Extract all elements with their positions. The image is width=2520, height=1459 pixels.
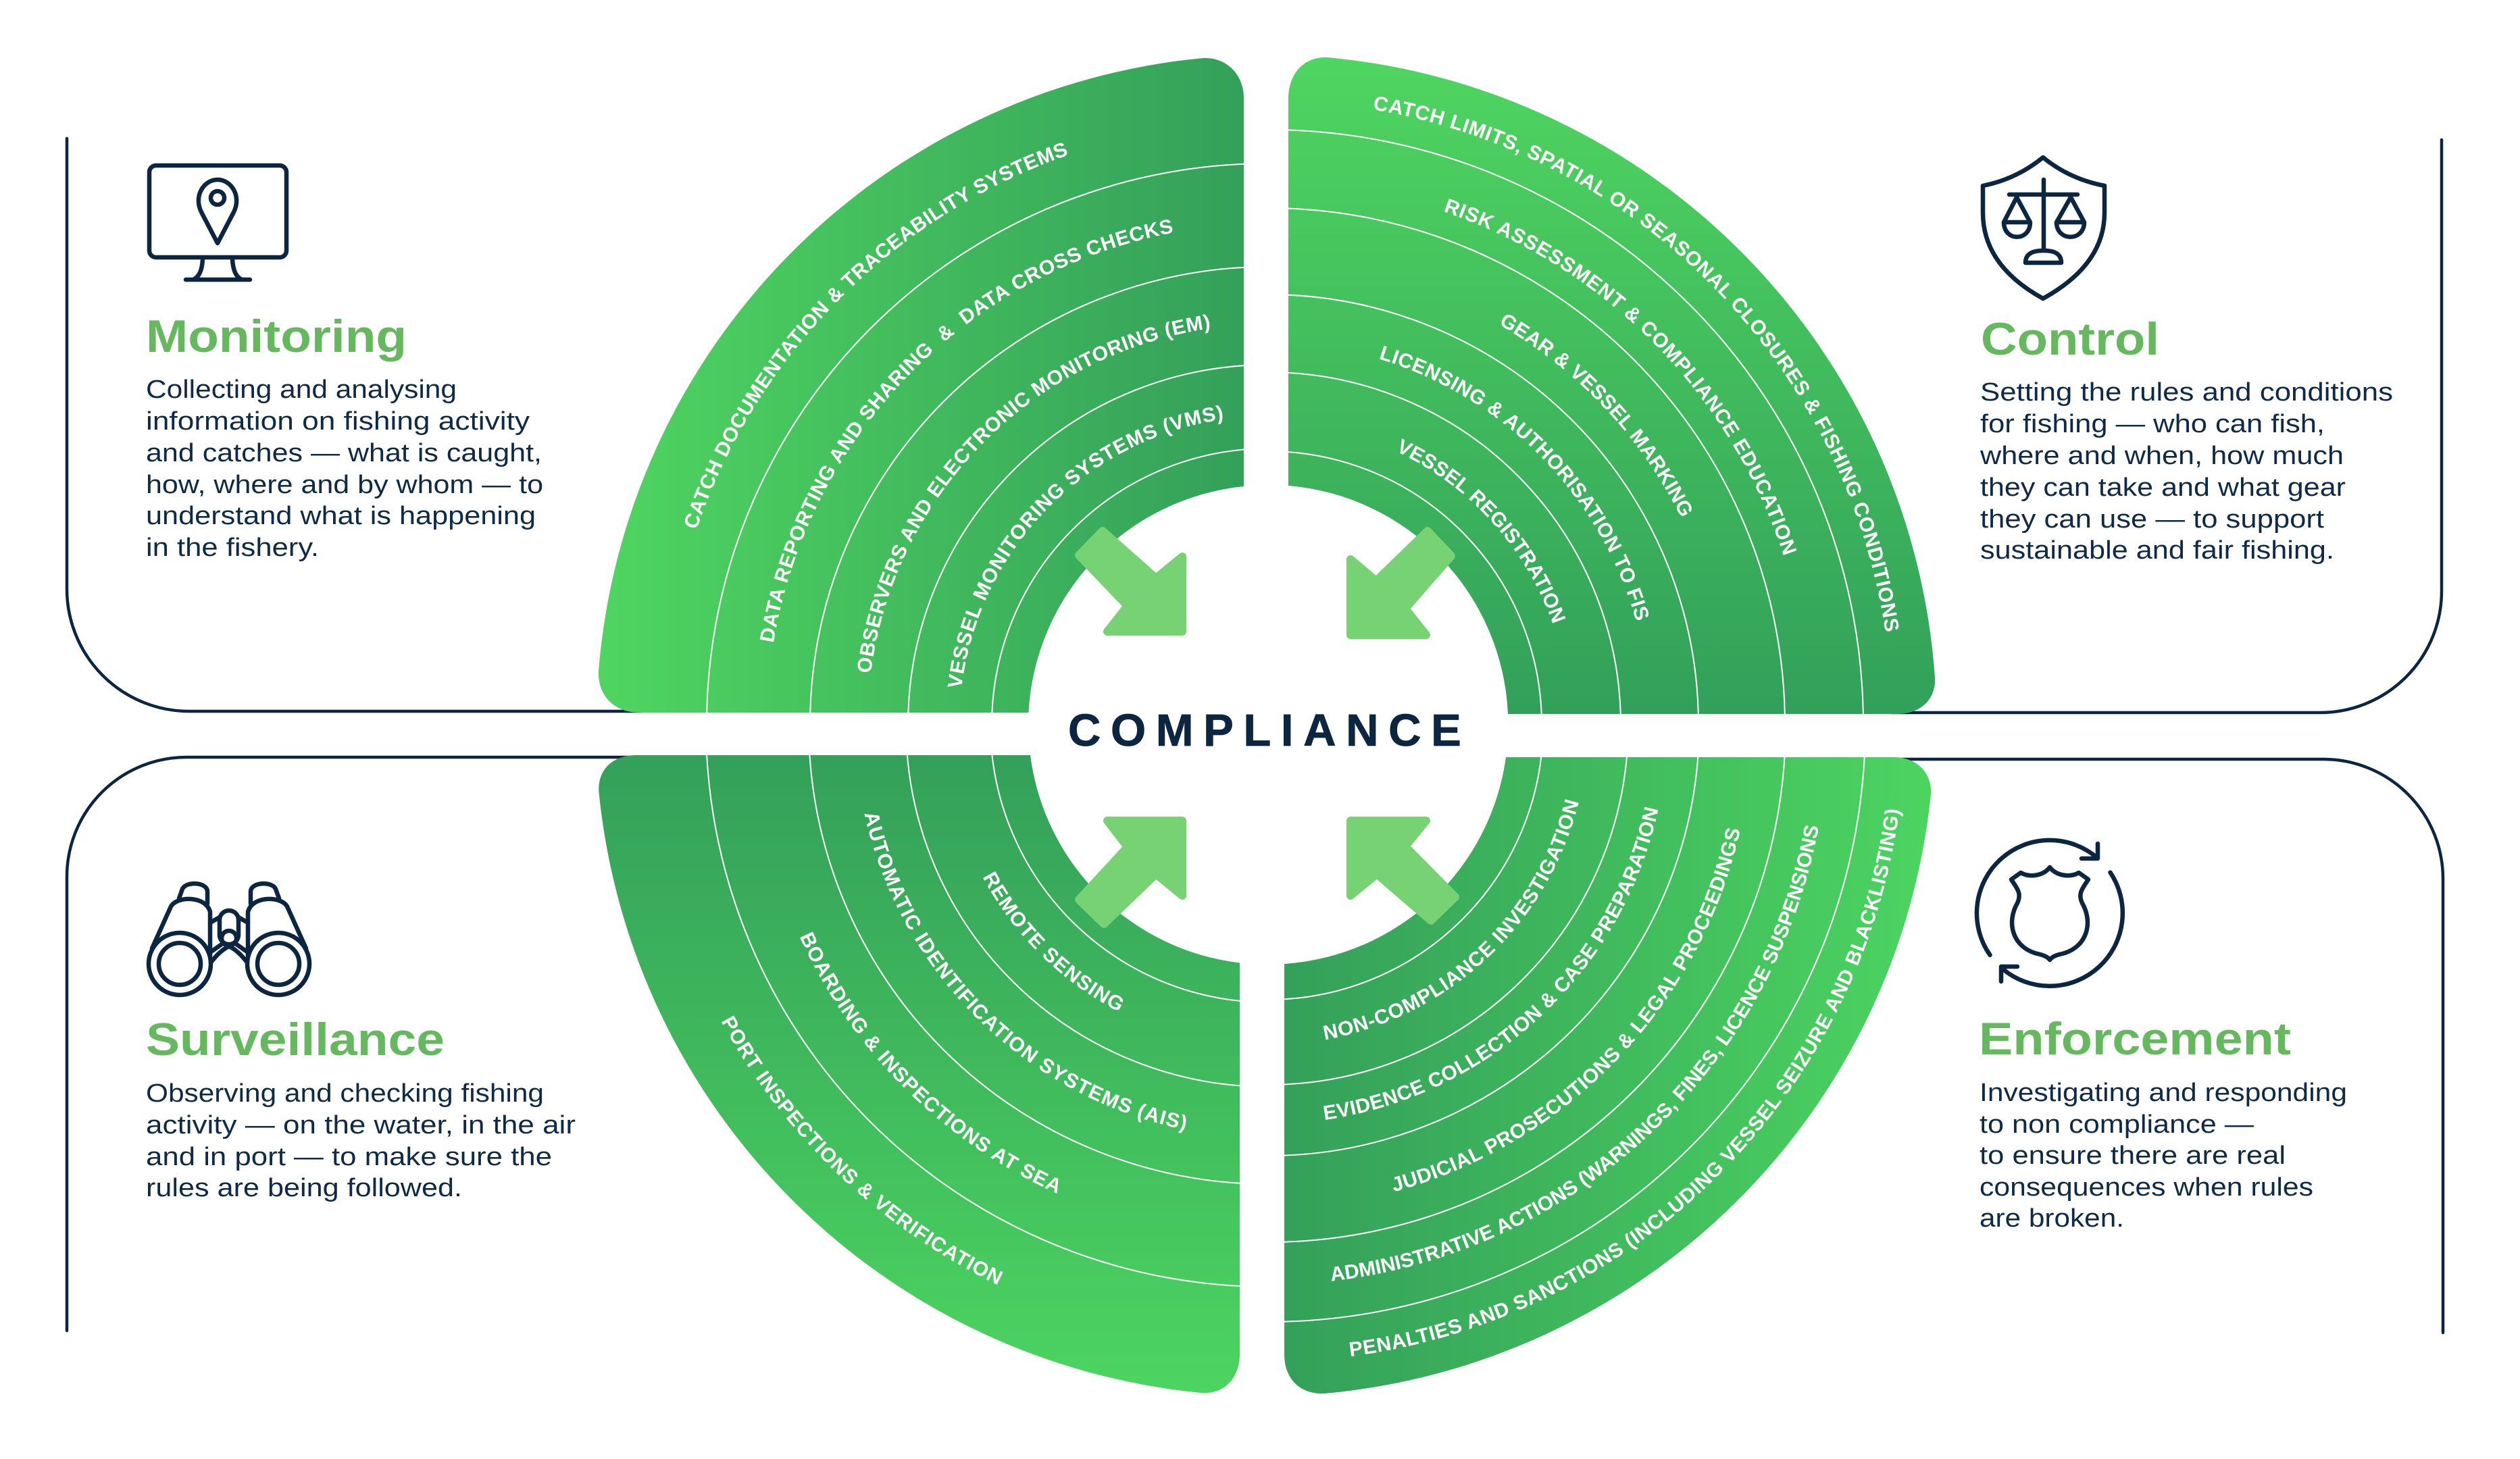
- label: boarding: BOARDING & INSPECTIONS AT SEA: [800, 931, 1058, 1194]
- panel: surveillance quadrant: [599, 755, 1240, 1393]
- icon: monitor with pin: [149, 165, 286, 280]
- label: licensing: LICENSING & AUTHORISATION TO FIS: [1380, 346, 1648, 620]
- label: evidence collection: EVIDENCE COLLECTION & CASE PREPARATION: [1324, 807, 1658, 1120]
- panel: monitoring quadrant: [599, 58, 1244, 713]
- label: catch limits: CATCH LIMITS, SPATIAL OR SEASONAL CLOSURES & FISHING CONDITIONS: [1374, 97, 1898, 632]
- arrow: bottom left: [1079, 821, 1182, 924]
- label: risk assessment: RISK ASSESSMENT & COMPLIANCE EDUCATION: [1444, 199, 1797, 555]
- label: non-compliance investigation: NON-COMPLIANCE INVESTIGATION: [1323, 799, 1579, 1040]
- text: monitoring description: in the fishery.: [146, 534, 319, 562]
- heading: control: Control: [1981, 313, 2159, 365]
- arrow: top right: [1351, 531, 1451, 635]
- icon: binoculars: [149, 884, 309, 995]
- panel outline: enforcement: [1892, 759, 2443, 1333]
- text: monitoring description: and catches — what is caught,: [146, 439, 542, 467]
- panel outline: control: [1892, 140, 2442, 713]
- arrow: top left: [1079, 531, 1182, 632]
- text: enforcement description: to non compliance —: [1980, 1110, 2254, 1139]
- text: monitoring description: [146, 376, 543, 562]
- panel: control quadrant: [1288, 57, 1935, 714]
- text: surveillance description: rules are being followed.: [146, 1174, 462, 1202]
- label: ais: AUTOMATIC IDENTIFICATION SYSTEMS (AIS): [864, 814, 1186, 1133]
- panel outline: monitoring: [67, 138, 642, 711]
- label: observers and em: OBSERVERS AND ELECTRONIC MONITORING (EM): [858, 314, 1209, 672]
- text: control description: for fishing — who can fish,: [1980, 410, 2325, 438]
- label: vms: VESSEL MONITORING SYSTEMS (VMS): [947, 405, 1223, 687]
- label: port inspections: PORT INSPECTIONS & VERIFICATION: [722, 1016, 1003, 1285]
- text: control description: they can take and what gear: [1980, 473, 2346, 502]
- icon: badge with cycle arrows: [1977, 840, 2123, 986]
- text: enforcement description: Investigating and responding: [1980, 1079, 2347, 1107]
- label: vessel registration: VESSEL REGISTRATION: [1400, 438, 1566, 623]
- label: port inspections: [697, 972, 1049, 1307]
- label: administrative actions: ADMINISTRATIVE ACTIONS (WARNINGS, FINES, LICENCE SUSPENSIONS: [1332, 825, 1818, 1281]
- panel: enforcement quadrant: [1284, 757, 1931, 1394]
- heading: enforcement: Enforcement: [1979, 1013, 2291, 1065]
- text: monitoring description: understand what is happening: [146, 502, 536, 530]
- text: monitoring description: information on fishing activity: [146, 407, 530, 436]
- label: catch documentation: CATCH DOCUMENTATION & TRACEABILITY SYSTEMS: [685, 143, 1067, 528]
- text: enforcement description: are broken.: [1980, 1204, 2124, 1233]
- icon: shield with scales: [1983, 157, 2105, 299]
- text: enforcement description: to ensure there are real: [1980, 1142, 2286, 1170]
- heading: monitoring: Monitoring: [146, 311, 407, 362]
- label: judicial prosecutions: JUDICIAL PROSECUTIONS & LEGAL PROCEEDINGS: [1393, 828, 1740, 1192]
- text: control description: sustainable and fair fishing.: [1980, 536, 2334, 565]
- text: monitoring description: how, where and by whom — to: [146, 471, 543, 499]
- arrow: bottom right: [1351, 821, 1455, 921]
- text: control description: they can use — to support: [1980, 505, 2324, 534]
- title: compliance: COMPLIANCE: [1068, 705, 1471, 756]
- heading: surveillance: Surveillance: [146, 1014, 445, 1065]
- label: remote sensing: REMOTE SENSING: [983, 871, 1123, 1010]
- text: control description: [1980, 378, 2393, 565]
- text: surveillance description: [146, 1079, 576, 1202]
- text: enforcement description: consequences when rules: [1980, 1173, 2313, 1202]
- text: control description: where and when, how much: [1980, 442, 2344, 470]
- label: penalties: PENALTIES AND SANCTIONS (INCLUDING VESSEL SEIZURE AND BLACKLISTING): [1350, 809, 1903, 1356]
- label: data reporting: DATA REPORTING AND SHARING & DATA CROSS CHECKS: [759, 220, 1173, 642]
- text: control description: Setting the rules and conditions: [1980, 378, 2393, 407]
- panel outline: surveillance: [67, 757, 642, 1331]
- text: monitoring description: Collecting and analysing: [146, 376, 457, 404]
- text: surveillance description: and in port — to make sure the: [146, 1143, 552, 1171]
- text: enforcement description: [1980, 1079, 2347, 1233]
- text: surveillance description: activity — on the water, in the air: [146, 1111, 576, 1140]
- text: surveillance description: Observing and checking fishing: [146, 1079, 544, 1108]
- label: gear marking: GEAR & VESSEL MARKING: [1501, 315, 1692, 516]
